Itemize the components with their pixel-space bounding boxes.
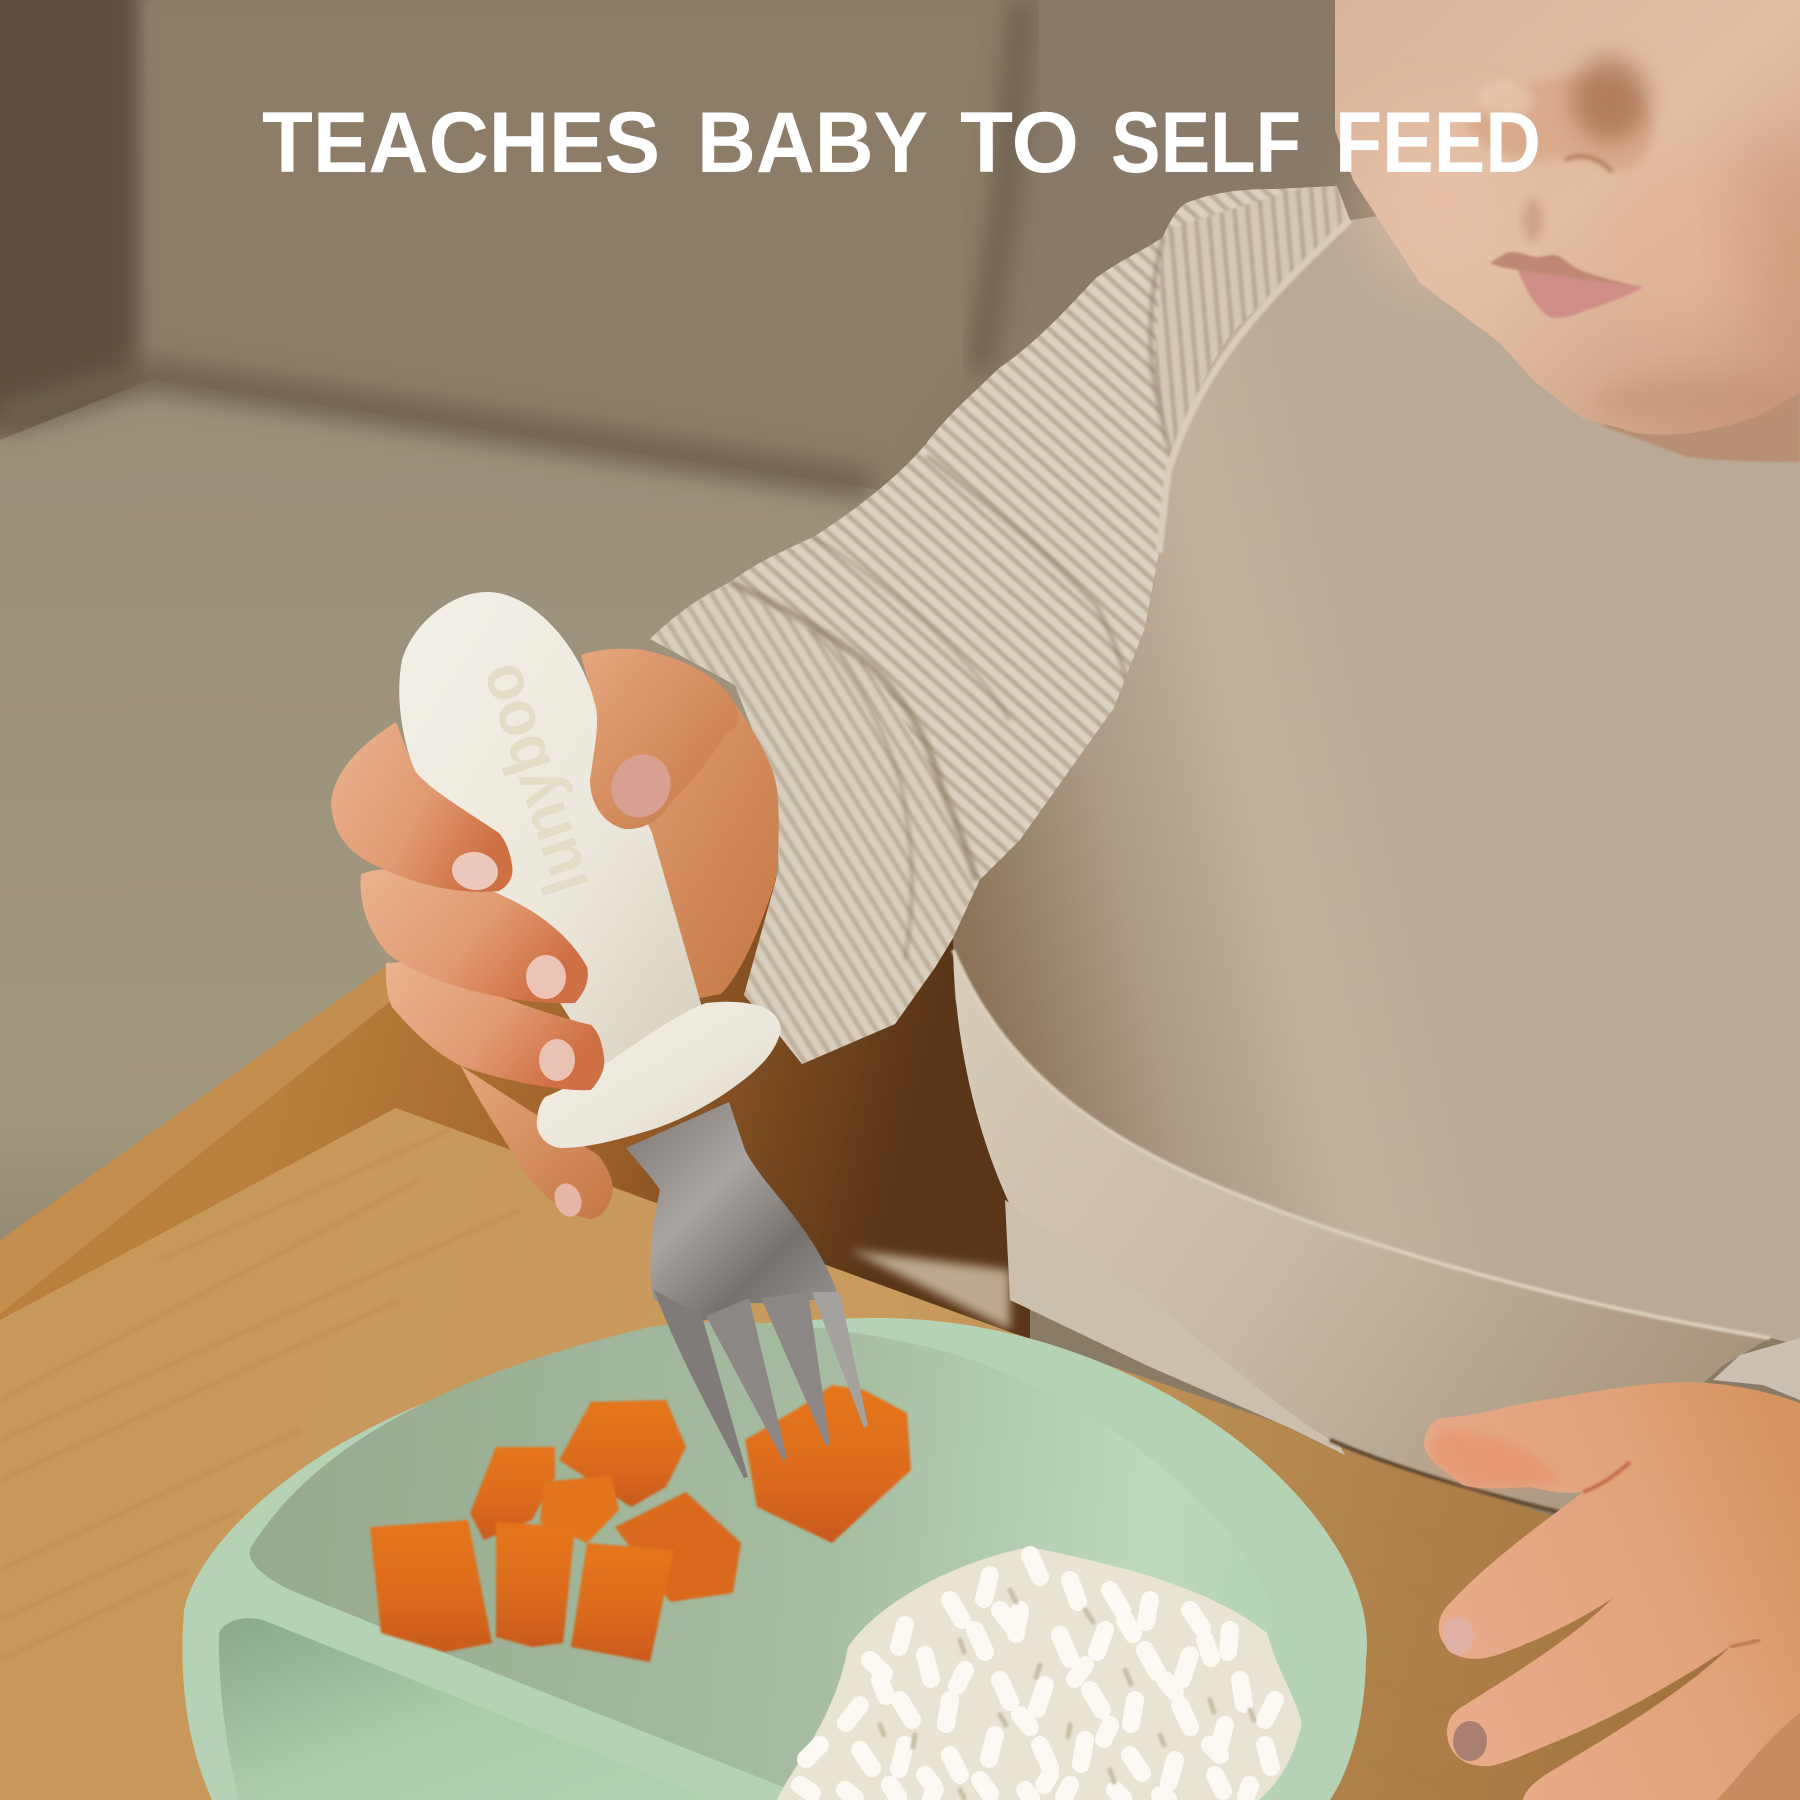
- third fingernail: [539, 1039, 575, 1081]
- right hand fingernails: [1443, 1617, 1487, 1761]
- right hand: [1424, 1382, 1800, 1800]
- handle flange: [537, 1002, 781, 1148]
- shirt under bib: [1005, 1200, 1345, 1455]
- sleeve cuff at right: [1713, 1338, 1800, 1400]
- title: [262, 95, 1541, 191]
- first fingernail: [450, 849, 500, 893]
- second fingernail: [526, 955, 566, 999]
- thumb: [581, 649, 738, 829]
- table plate: [182, 1318, 1367, 1800]
- cuff ribs: [640, 582, 976, 1080]
- high chair tray: [0, 860, 1800, 1800]
- bib pocket: [953, 950, 1770, 1513]
- little fingernail: [550, 1180, 586, 1220]
- lips: [1490, 252, 1643, 318]
- left hand: front fingers and thumb: [331, 649, 738, 1090]
- title: TO: [960, 95, 1079, 191]
- plate small compartment: [219, 1618, 713, 1800]
- nose: [1467, 58, 1653, 242]
- little finger: [461, 1066, 613, 1219]
- carrot cube on the fork: [745, 1385, 911, 1543]
- fork tines: [654, 1290, 868, 1478]
- rice pile: [777, 1547, 1301, 1800]
- third finger: [386, 960, 604, 1090]
- fork: [626, 1102, 868, 1478]
- title: BABY: [697, 95, 928, 191]
- sleeve: knitted arm: [640, 170, 1370, 1080]
- title: TEACHES: [262, 95, 660, 191]
- thumbnail: [601, 745, 681, 827]
- bib: [953, 200, 1800, 1513]
- handle embossed logo: lunyboo: [460, 655, 603, 904]
- plate main compartment: [250, 1322, 1309, 1800]
- baby face and neck: [1335, 0, 1800, 462]
- palm behind handle: [581, 649, 779, 1000]
- carrot cubes on the plate: [370, 1400, 741, 1662]
- sleeve folds: [730, 237, 1172, 960]
- first finger: [331, 722, 512, 892]
- title: SELF: [1111, 95, 1301, 191]
- second finger: [361, 869, 588, 1003]
- title: FEED: [1335, 95, 1541, 191]
- left hand: back fingers: [461, 649, 779, 1220]
- shoulder ribs: [1154, 186, 1350, 446]
- fork handle: [399, 592, 781, 1148]
